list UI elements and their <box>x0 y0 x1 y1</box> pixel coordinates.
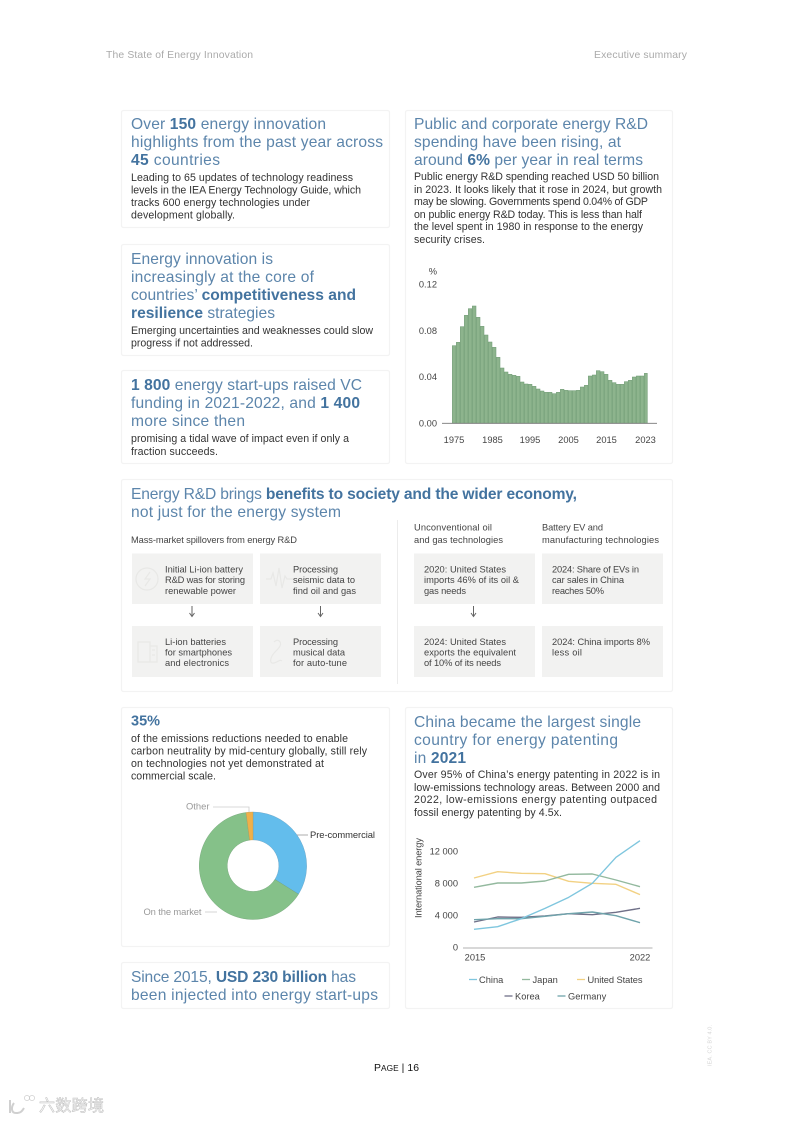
bar chart: public energy R&D share of GDP: % <box>429 266 437 276</box>
bar chart: public energy R&D share of GDP: 2023 <box>635 435 656 445</box>
panel: China energy patenting: low-emissions technology areas. Between 2000 and <box>414 782 660 794</box>
card: EV share in China: 2024: Share of EVs in <box>552 564 639 574</box>
panel: start-ups VC funding: more since then <box>131 413 245 430</box>
panel: public and corporate R&D spending: the level spent in 1980 in response to the energy <box>414 221 644 233</box>
panel: 150 energy innovation highlights: tracks 600 energy technologies under <box>131 197 310 209</box>
panel: 150 energy innovation highlights <box>122 110 390 228</box>
panel: public and corporate R&D spending: may be slowing. Governments spend 0.04% of GDP <box>414 196 648 208</box>
panel: competitiveness and resilience: Emerging uncertainties and weaknesses could slow <box>131 325 373 337</box>
panel: benefits to society and the wider economy: Energy R&D brings benefits to society and the wider economy, <box>131 486 577 503</box>
column labels: Mass-market spillovers from energy R&D <box>131 535 297 545</box>
card: seismic data: Processing <box>293 564 338 574</box>
bar chart: public energy R&D share of GDP: 1985 <box>482 435 503 445</box>
panel: competitiveness and resilience: progress if not addressed. <box>131 338 253 350</box>
bar chart: public energy R&D share of GDP: 2005 <box>558 435 579 445</box>
panel: 35% emissions reductions: 35% <box>131 714 160 730</box>
panel: 35% emissions reductions: of the emissions reductions needed to enable <box>131 733 348 745</box>
line chart: energy patents by country: 2022 <box>630 952 650 962</box>
card: US exports 2024: exports the equivalent <box>424 648 516 658</box>
panel: China energy patenting: China became the largest single <box>414 714 641 731</box>
donut chart: technology maturity: Other <box>186 800 209 812</box>
column labels: Unconventional oil <box>414 522 492 532</box>
card: seismic data: find oil and gas <box>293 586 356 596</box>
legend: Korea <box>515 992 541 1002</box>
bar chart: public energy R&D share of GDP: 1975 <box>444 435 464 445</box>
panel: 35% emissions reductions: on technologies not yet demonstrated at <box>131 758 324 770</box>
panel: competitiveness and resilience: Energy innovation is <box>131 251 273 268</box>
column labels: and gas technologies <box>414 535 503 545</box>
panel: 35% emissions reductions: carbon neutrality by mid-century globally, still rely <box>131 746 368 758</box>
panel: USD 230 billion: been injected into energy start-ups <box>131 987 378 1004</box>
bar chart: public energy R&D share of GDP: 0.08 <box>419 326 437 336</box>
panel: 35% emissions reductions: commercial scale. <box>131 770 216 782</box>
card: auto-tune <box>260 626 381 677</box>
panel: benefits to society and the wider economy: not just for the energy system <box>131 504 341 521</box>
watermark <box>10 1092 104 1116</box>
card: China oil imports: less oil <box>552 648 582 658</box>
card: EV share in China: reaches 50% <box>552 586 604 596</box>
card: EV share in China <box>542 554 663 604</box>
bar chart: public energy R&D share of GDP <box>419 266 657 445</box>
page header: Executive summary <box>594 50 688 61</box>
legend: China <box>479 975 504 985</box>
card: US exports 2024 <box>414 626 535 677</box>
bar chart: public energy R&D share of GDP: 1995 <box>520 435 540 445</box>
panel: competitiveness and resilience: resilience strategies <box>131 305 275 322</box>
panel: competitiveness and resilience: countries’ competitiveness and <box>131 287 356 304</box>
card: US imports 2020 <box>414 554 535 604</box>
panel: USD 230 billion: Since 2015, USD 230 billion has <box>131 969 356 986</box>
panel: 150 energy innovation highlights: highlights from the past year across <box>131 134 383 151</box>
panel: public and corporate R&D spending: on public energy R&D today. This is less than half <box>414 209 642 221</box>
arrow: seismic spillover <box>318 606 323 616</box>
card: EV share in China: car sales in China <box>552 575 625 585</box>
panel: 150 energy innovation highlights: 45 countries <box>131 152 220 169</box>
card: seismic data <box>260 554 381 604</box>
card: auto-tune: Processing <box>293 637 338 647</box>
panel: 150 energy innovation highlights: development globally. <box>131 210 235 222</box>
donut chart: technology maturity <box>144 800 375 919</box>
card: US exports 2024: 2024: United States <box>424 637 506 647</box>
line chart: energy patents by country: 12 000 <box>430 846 458 856</box>
panel: start-ups VC funding: 1 800 energy start-ups raised VC <box>131 377 362 394</box>
panel: start-ups VC funding <box>122 370 390 464</box>
watermark: 六数跨境 <box>39 1092 104 1116</box>
card: smartphones and electronics: and electronics <box>165 658 229 668</box>
panel: 150 energy innovation highlights: Over 150 energy innovation <box>131 116 326 133</box>
panel: USD 230 billion <box>122 962 390 1008</box>
panel: China energy patenting: fossil energy patenting by 4.5x. <box>414 807 562 819</box>
panel: China energy patenting: Over 95% of China’s energy patenting in 2022 is in <box>414 769 660 781</box>
panel: public and corporate R&D spending: in 2023. It looks likely that it rose in 2024, but growth <box>414 184 662 196</box>
panel: China energy patenting: country for energy patenting <box>414 732 618 749</box>
arrow: battery spillover <box>190 606 194 616</box>
card: auto-tune: for auto-tune <box>293 658 347 668</box>
panel: start-ups VC funding: funding in 2021-2022, and 1 400 <box>131 395 360 412</box>
bar chart: public energy R&D share of GDP: 2015 <box>596 435 617 445</box>
panel: public and corporate R&D spending <box>406 110 672 464</box>
column labels <box>131 522 659 545</box>
panel: public and corporate R&D spending: security crises. <box>414 234 485 246</box>
line chart: energy patents by country: 8 000 <box>435 878 458 888</box>
line chart: energy patents by country: International energy <box>414 838 424 918</box>
legend: Germany <box>568 992 607 1002</box>
card: Li-ion battery R&D: renewable power <box>165 586 236 596</box>
panel: competitiveness and resilience: increasingly at the core of <box>131 269 315 286</box>
bar chart: public energy R&D share of GDP: 0.04 <box>419 372 437 382</box>
line chart: energy patents by country: 4 000 <box>435 910 458 920</box>
panel: China energy patenting <box>406 708 672 1008</box>
legend: Japan <box>532 975 558 985</box>
card: US exports 2024: of 10% of its needs <box>424 658 501 668</box>
panel: public and corporate R&D spending: spending have been rising, at <box>414 134 622 151</box>
card: US imports 2020: gas needs <box>424 586 466 596</box>
donut chart: technology maturity: On the market <box>144 906 202 917</box>
donut chart: technology maturity: Pre-commercial <box>310 829 375 840</box>
bar chart: public energy R&D share of GDP: 0.12 <box>419 280 437 290</box>
panel: 35% emissions reductions <box>122 708 390 946</box>
panel: public and corporate R&D spending: around 6% per year in real terms <box>414 152 643 169</box>
page header <box>106 50 688 61</box>
panel: China energy patenting: 2022, low-emissions energy patenting outpaced <box>414 794 657 806</box>
panel: start-ups VC funding: promising a tidal wave of impact even if only a <box>131 433 349 445</box>
page number: PAGE | 16 <box>374 1063 419 1074</box>
column labels: Battery EV and <box>542 522 603 532</box>
licence note: IEA. CC BY 4.0. <box>708 1025 714 1066</box>
card: seismic data: seismic data to <box>293 575 355 585</box>
card: US imports 2020: imports 46% of its oil & <box>424 575 520 585</box>
line chart: energy patents by country: 2015 <box>465 952 485 962</box>
panel: start-ups VC funding: fraction succeeds. <box>131 446 218 458</box>
card: smartphones and electronics: Li-ion batteries <box>165 637 226 647</box>
card: Li-ion battery R&D: Initial Li-ion battery <box>165 564 243 574</box>
panel: public and corporate R&D spending: Public and corporate energy R&D <box>414 116 648 133</box>
panel: 150 energy innovation highlights: levels in the IEA Energy Technology Guide, which <box>131 184 361 196</box>
card: US imports 2020: 2020: United States <box>424 564 506 574</box>
card: China oil imports: 2024: China imports 8% <box>552 637 650 647</box>
card: Li-ion battery R&D <box>132 554 253 604</box>
card: Li-ion battery R&D: R&D was for storing <box>165 575 245 585</box>
legend: United States <box>588 975 643 985</box>
card: auto-tune: musical data <box>293 648 346 658</box>
page header: The State of Energy Innovation <box>106 50 253 61</box>
panel: benefits to society and the wider economy <box>122 480 672 692</box>
bar chart: public energy R&D share of GDP: 0.00 <box>419 418 437 428</box>
arrow: US oil <box>471 606 476 616</box>
panel: competitiveness and resilience <box>122 244 390 356</box>
panel: 150 energy innovation highlights: Leading to 65 updates of technology readiness <box>131 172 353 184</box>
column labels: manufacturing technologies <box>542 535 659 545</box>
panel: China energy patenting: in 2021 <box>414 750 466 767</box>
card: smartphones and electronics: for smartphones <box>165 648 232 658</box>
panel: public and corporate R&D spending: Public energy R&D spending reached USD 50 billion <box>414 171 659 183</box>
legend <box>469 975 643 1002</box>
card: smartphones and electronics <box>132 626 253 677</box>
card: China oil imports <box>542 626 663 677</box>
line chart: energy patents by country: 0 <box>453 942 458 952</box>
line chart: energy patents by country <box>414 838 652 1002</box>
